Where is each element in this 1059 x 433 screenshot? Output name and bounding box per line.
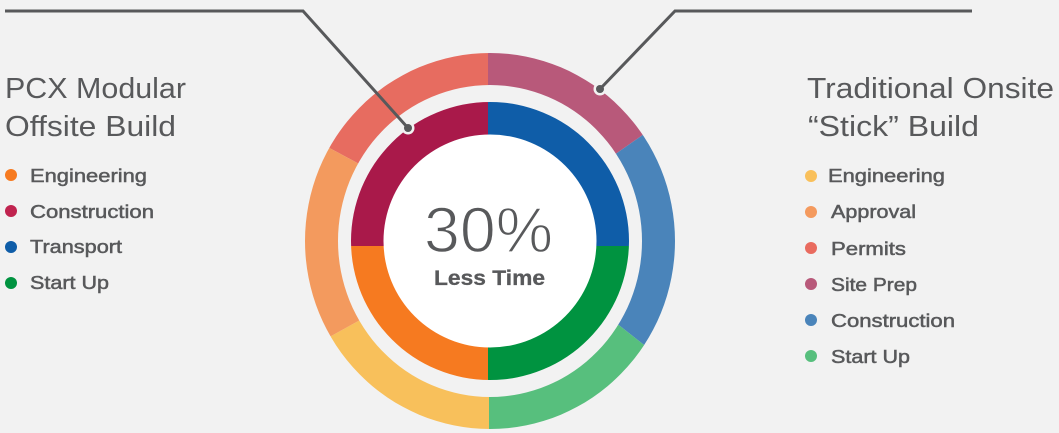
legend item: Approval: Approval xyxy=(831,201,916,222)
inner ring: PCX modular timeline xyxy=(351,102,629,380)
callout line: right, with dot xyxy=(594,11,972,96)
legend item: Approval xyxy=(805,201,916,222)
legend item: Start Up: Start Up xyxy=(831,346,910,367)
legend: traditional phases xyxy=(805,165,955,367)
legend item: Construction: Construction xyxy=(30,201,154,222)
heading: Traditional Onsite Stick Build: Traditional Onsite xyxy=(807,73,1054,105)
segment: construction xyxy=(616,135,675,345)
legend item: Engineering: Engineering xyxy=(828,165,945,186)
segment: permits xyxy=(329,53,488,164)
segment: site prep xyxy=(488,53,643,154)
legend item: Permits: Permits xyxy=(831,238,906,259)
legend item: Permits xyxy=(805,238,906,259)
legend item: Site Prep xyxy=(805,274,917,295)
legend item: Engineering: Engineering xyxy=(30,165,147,186)
legend: PCX modular phases xyxy=(5,165,154,293)
segment: construction xyxy=(351,102,488,246)
legend item: Start Up: Start Up xyxy=(30,272,109,293)
center figure: 30%: 30% xyxy=(424,194,553,266)
legend item: Start Up xyxy=(5,272,109,293)
segment: transport xyxy=(488,102,629,246)
legend item: Transport: Transport xyxy=(30,236,122,257)
legend item: Engineering xyxy=(5,165,147,186)
legend item: Start Up xyxy=(805,346,910,367)
segment: start up xyxy=(489,324,644,429)
callout line: left, with dot xyxy=(5,11,414,134)
center caption: Less Time: Less Time xyxy=(434,267,545,290)
segment: engineering xyxy=(351,246,488,380)
white center circle xyxy=(383,134,597,348)
outer ring: traditional build timeline xyxy=(305,53,675,429)
segment: engineering xyxy=(330,320,489,429)
legend item: Construction xyxy=(805,310,955,331)
heading: Traditional Onsite Stick Build: “Stick” Build xyxy=(808,111,979,143)
legend item: Site Prep: Site Prep xyxy=(831,274,917,295)
heading: Traditional Onsite Stick Build xyxy=(807,73,1054,143)
heading: PCX Modular Offsite Build: PCX Modular xyxy=(5,73,187,105)
legend item: Construction xyxy=(5,201,154,222)
heading: PCX Modular Offsite Build xyxy=(5,73,187,143)
legend item: Transport xyxy=(5,236,122,257)
heading: PCX Modular Offsite Build: Offsite Build xyxy=(5,111,176,143)
segment: start up xyxy=(488,246,629,380)
segment: approval xyxy=(305,148,360,336)
legend item: Construction: Construction xyxy=(831,310,955,331)
